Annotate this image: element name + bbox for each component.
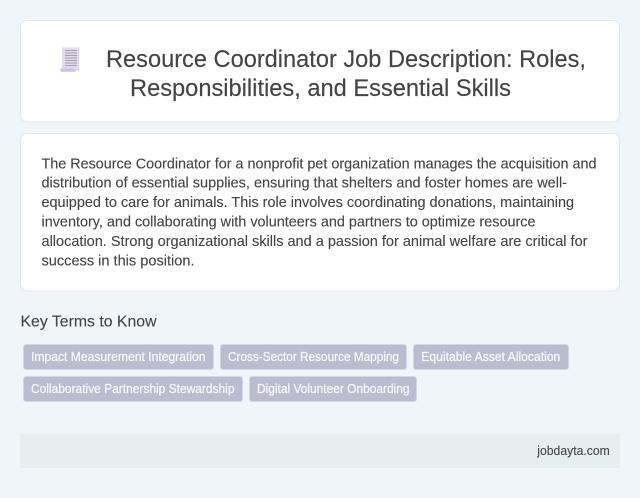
tag: cross-sector resource mapping: [220, 344, 406, 370]
description text: allocation. Strong organizational skills and a passion for animal welfare are critical for: [42, 234, 588, 250]
tag: cross-sector resource mapping: Cross-Sector Resource Mapping: [228, 349, 399, 364]
tag: equitable asset allocation: [414, 344, 568, 370]
description text: distribution of essential supplies, ensuring that shelters and foster homes are well-: [42, 176, 567, 192]
panel: title card: [20, 20, 620, 122]
footer bar: jobdayta.com: [536, 443, 610, 458]
tag: impact measurement integration: [24, 344, 214, 370]
tags: key terms: [24, 344, 568, 402]
tag: collaborative partnership stewardship: [24, 376, 242, 402]
heading: key terms: Key Terms to Know: [20, 314, 157, 331]
panel: description card: [20, 134, 620, 291]
title: Responsibilities, and Essential Skills: [130, 75, 511, 102]
icon: document scroll: [60, 48, 79, 72]
tag: equitable asset allocation: Equitable Asset Allocation: [421, 349, 560, 364]
description text: [42, 156, 596, 269]
description text: The Resource Coordinator for a nonprofit pet organization manages the acquisition and: [42, 156, 596, 172]
tag: digital volunteer onboarding: Digital Volunteer Onboarding: [257, 381, 410, 396]
footer bar: [20, 434, 620, 468]
tag: impact measurement integration: Impact Measurement Integration: [31, 349, 206, 364]
description text: equipped to care for animals. This role involves coordinating donations, maintaining: [42, 195, 574, 211]
description text: inventory, and collaborating with volunteers and partners to optimize resource: [42, 215, 536, 231]
title: [106, 46, 586, 102]
tag: collaborative partnership stewardship: Collaborative Partnership Stewardship: [31, 381, 234, 396]
description text: success in this position.: [42, 253, 194, 269]
tag: digital volunteer onboarding: [250, 376, 416, 402]
title: Resource Coordinator Job Description: Roles,: [106, 46, 586, 73]
